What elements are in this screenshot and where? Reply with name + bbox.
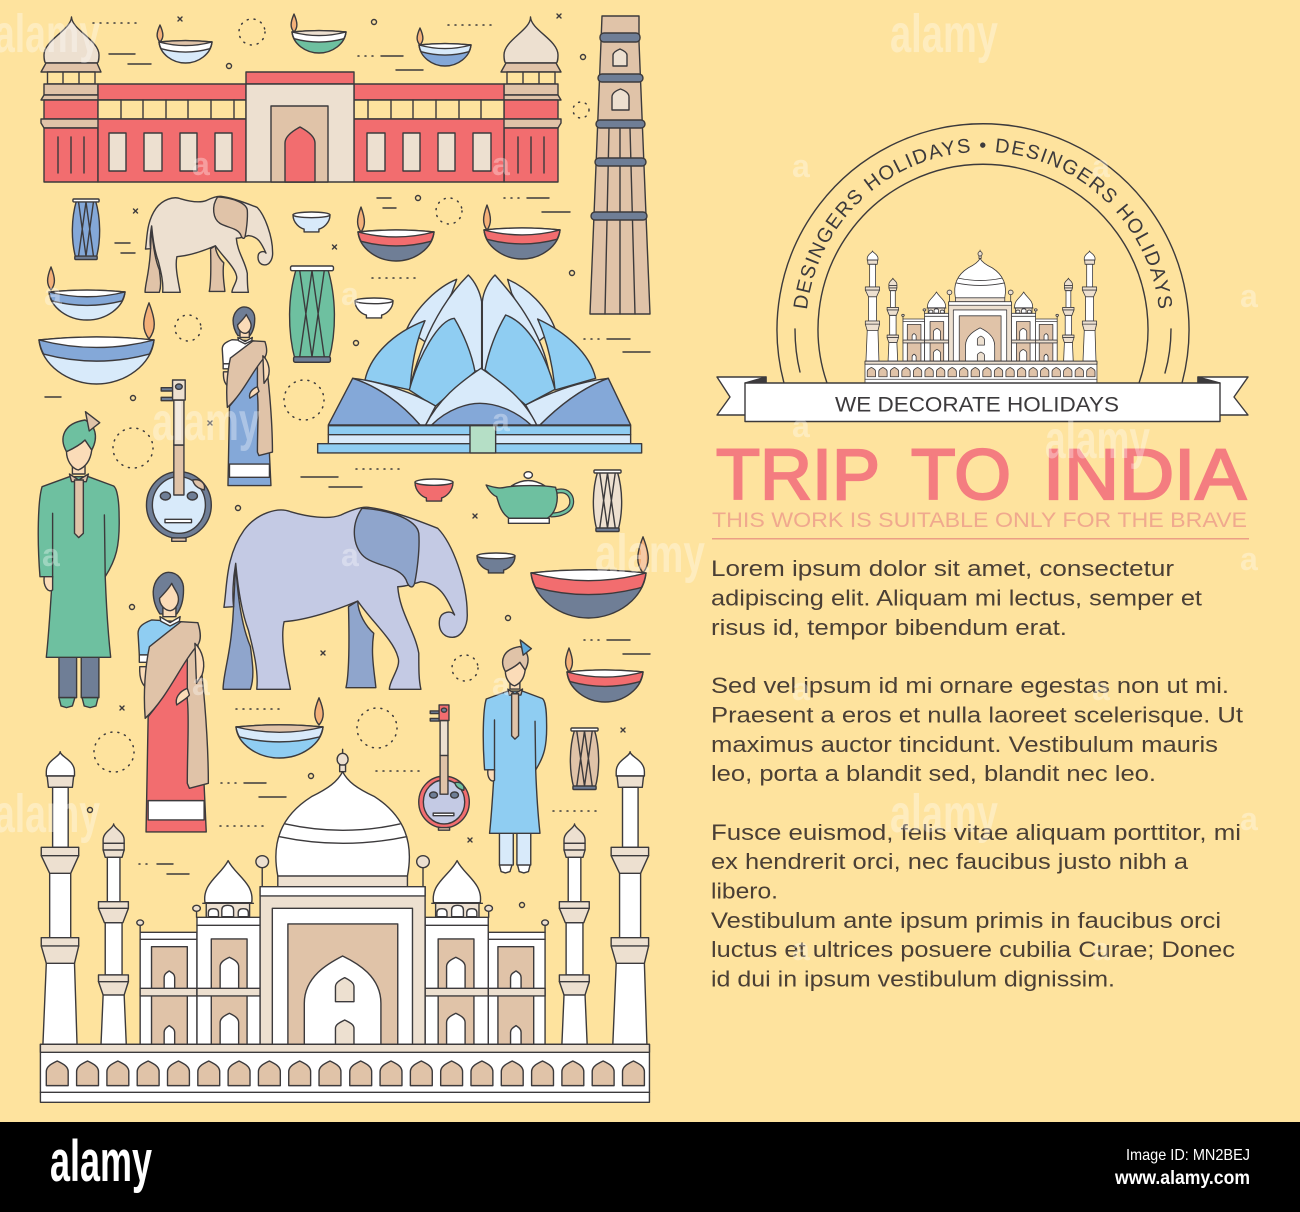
illustration: oil lamps	[39, 14, 648, 758]
icon: teapot	[486, 472, 572, 523]
stock watermarks: a	[341, 276, 359, 312]
illustration: large elephant	[223, 507, 467, 689]
body text: Lorem ipsum dolor sit amet, consectetur	[711, 556, 1174, 581]
body text	[711, 556, 1243, 992]
stock watermarks: a	[1092, 671, 1110, 707]
illustration: palace	[41, 17, 561, 182]
body text: leo, porta a blandit sed, blandit nec leo.	[711, 761, 1156, 786]
badge taj mahal	[865, 250, 1097, 383]
stock watermarks: a	[1240, 541, 1258, 577]
title: TO	[911, 436, 1011, 515]
title	[716, 436, 1247, 515]
illustration: lotus temple	[318, 275, 642, 453]
illustration: drums	[72, 199, 622, 790]
stock watermarks: a	[1092, 148, 1110, 184]
stock watermarks: a	[1092, 931, 1110, 967]
stock watermarks: a	[42, 537, 60, 573]
right wing	[354, 84, 504, 182]
left tower	[41, 17, 101, 182]
illustration: qutb minar tower	[590, 16, 650, 314]
figure: woman in red sari	[138, 572, 208, 832]
stock watermarks: a	[192, 666, 210, 702]
stock watermarks: a	[192, 146, 210, 182]
stock watermarks: a	[492, 666, 510, 702]
right tower	[501, 17, 561, 182]
footer bar	[0, 1122, 1300, 1212]
subtitle rule	[712, 538, 1249, 540]
figure: man in blue	[483, 640, 547, 873]
illustration: small bowls	[293, 212, 515, 573]
stock watermarks: alamy	[890, 4, 998, 64]
central gate	[246, 72, 354, 182]
stock watermarks: alamy	[595, 524, 705, 584]
body text: libero.	[711, 878, 778, 904]
stock watermarks: alamy	[1045, 410, 1150, 470]
stock watermarks	[0, 4, 1258, 967]
stock watermarks: a	[341, 537, 359, 573]
stock watermarks: a	[792, 408, 810, 444]
image id: Image ID: MN2BEJ	[1126, 1147, 1250, 1164]
body text: Praesent a eros et nulla laoreet scelerisque. Ut	[711, 702, 1243, 728]
stock watermarks: a	[492, 402, 510, 438]
website: www.alamy.com	[1114, 1168, 1250, 1189]
stock watermarks: alamy	[890, 784, 998, 844]
figure: man in green	[38, 412, 119, 708]
curved brand text: DESINGERS HOLIDAYS • DESINGERS HOLIDAYS	[793, 138, 1172, 308]
body text: risus id, tempor bibendum erat.	[711, 615, 1067, 640]
body text: Vestibulum ante ipsum primis in faucibus orci	[711, 908, 1221, 933]
title: INDIA	[1043, 436, 1247, 515]
ribbon	[717, 377, 1248, 422]
illustration: small elephant	[145, 196, 273, 292]
logo: emblem badge	[716, 123, 1249, 422]
body text: adipiscing elit. Aliquam mi lectus, semper et	[711, 586, 1202, 610]
instrument: sitar with red body	[419, 705, 469, 830]
body text: luctus et ultrices posuere cubilia Curae; Donec	[711, 937, 1235, 962]
stock watermarks: a	[44, 276, 62, 312]
decorative scatter	[45, 14, 650, 908]
badge arcs	[777, 124, 1189, 383]
body text: Sed vel ipsum id mi ornare egestas non ut mi.	[711, 673, 1229, 698]
illustration: taj mahal	[40, 749, 649, 1102]
stock watermarks: a	[1240, 278, 1258, 314]
body text: id dui in ipsum vestibulum dignissim.	[711, 966, 1115, 992]
left wing	[98, 84, 246, 182]
body text: ex hendrerit orci, nec faucibus justo nibh a	[711, 849, 1189, 874]
stock watermarks: alamy	[152, 392, 260, 452]
stock watermarks: a	[1240, 801, 1258, 837]
figure: woman in blue sari	[222, 307, 272, 486]
subtitle: THIS WORK IS SUITABLE ONLY FOR THE BRAVE	[712, 509, 1247, 532]
body text: maximus auctor tincidunt. Vestibulum mauris	[711, 732, 1218, 757]
stock watermarks: a	[792, 931, 810, 967]
stock watermarks: a	[792, 148, 810, 184]
ribbon text: WE DECORATE HOLIDAYS	[835, 392, 1119, 416]
stock watermarks: a	[792, 671, 810, 707]
footer logo: alamy	[50, 1129, 152, 1194]
stock watermarks: a	[492, 146, 510, 182]
body text: Fusce euismod, felis vitae aliquam porttitor, mi	[711, 820, 1241, 845]
title: TRIP	[716, 436, 880, 515]
instrument: sitar with slate body	[146, 380, 211, 541]
